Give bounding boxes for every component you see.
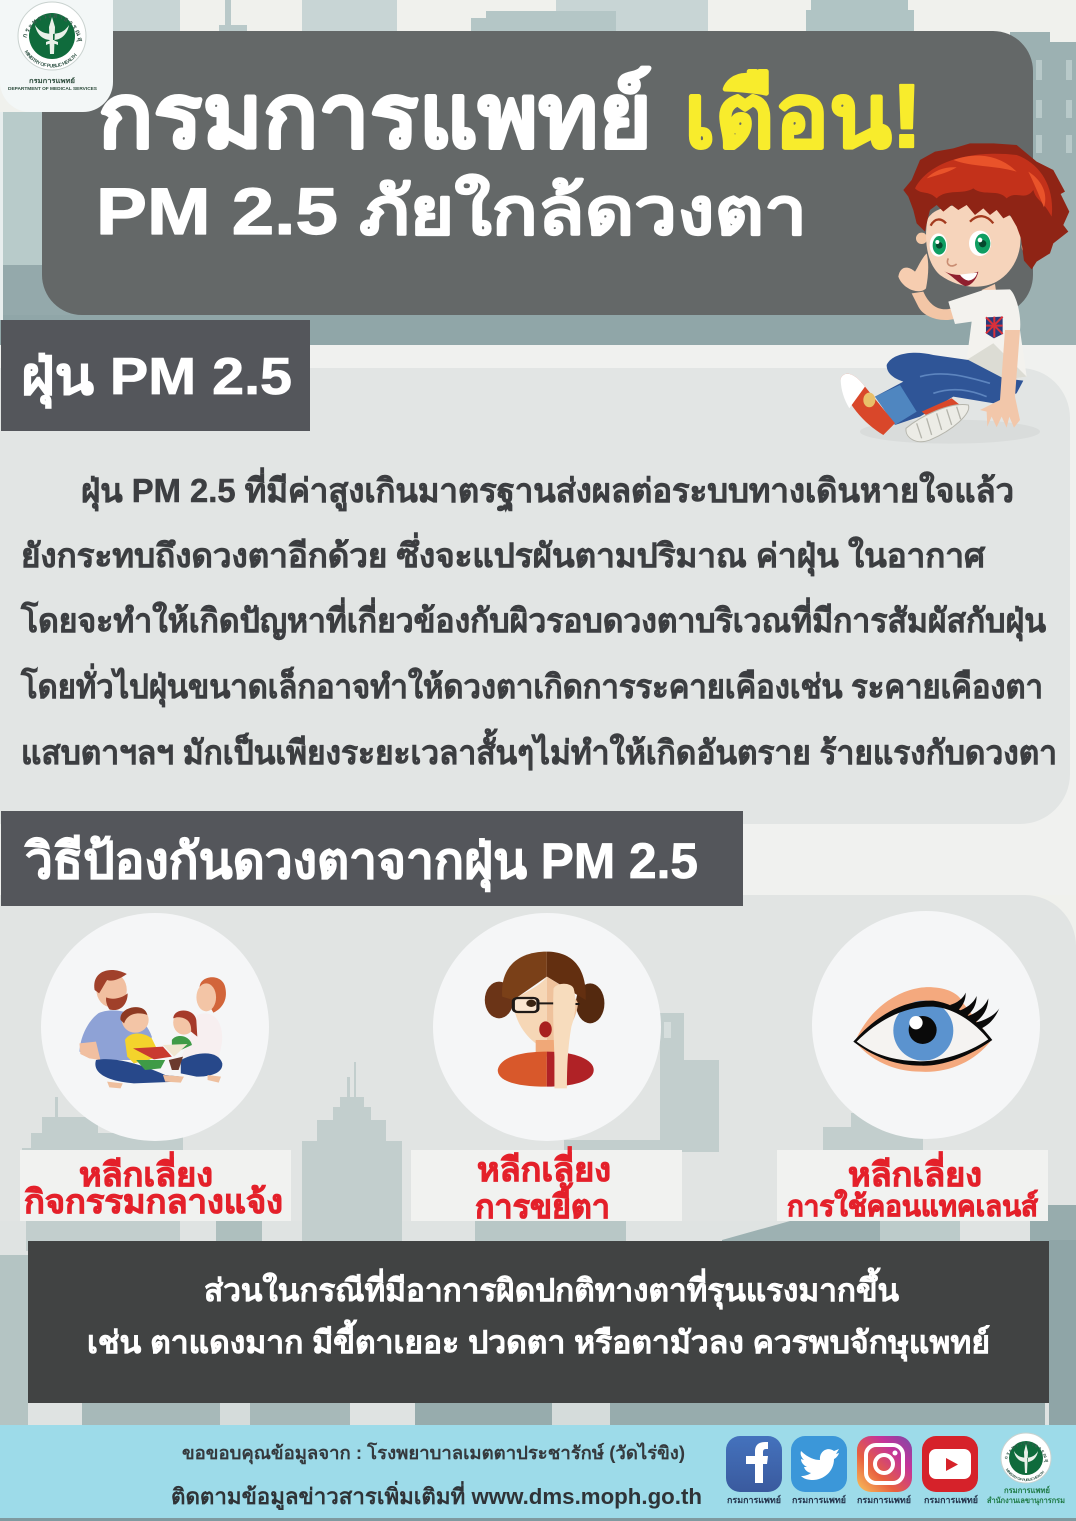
logo: ministry of public health: กระทรวงสาธารณสุข [1004,1442,1048,1462]
girl [173,1011,195,1035]
label: avoid rubbing eyes: หลีกเลี่ยง [477,1146,611,1188]
label: avoid outdoor activity: กิจกรรมกลางแจ้ง [24,1183,283,1220]
icon: youtube [922,1436,978,1492]
boy [122,1007,149,1033]
section heading: PM 2.5 dust [1,320,310,431]
title [96,66,922,248]
shirt [948,289,1027,380]
mother [200,977,226,1013]
text block: description: ฝุ่น PM 2.5 ที่มีค่าสูงเกินมาตรฐานส่งผลต่อระบบทางเดินหายใจแล้ว [81,467,1014,512]
section heading: PM 2.5 dust: ฝุ่น PM 2.5 [21,348,292,409]
title: PM 2.5 ภัยใกล้ดวงตา [96,172,807,248]
circle: avoid contact lenses [812,911,1040,1139]
callout: when to see an ophthalmologist: เช่น ตาแดงมาก มีขี้ตาเยอะ ปวดตา หรือตามัวลง ควรพบจักษุแพทย์ [87,1319,990,1362]
arm and hand [912,292,957,320]
circle: avoid outdoor activity [41,913,269,1141]
logo badge [0,0,113,112]
ears [916,233,927,244]
father [79,1010,152,1060]
jeans [95,1059,181,1083]
text block: description: โดยจะทำให้เกิดปัญหาที่เกี่ยวข้องกับผิวรอบดวงตาบริเวณที่มีการสัมผัสกับฝุ่น [20,597,1046,642]
jeans [875,353,1023,425]
right arm and hand [980,330,1020,428]
label: avoid contact lenses [777,1150,1048,1223]
logo badge: กรมการแพทย์ [29,77,75,85]
icon labels: กรมการแพทย์ [727,1494,781,1505]
icon labels: กรมการแพทย์ [792,1494,846,1505]
flag pocket [986,317,1003,338]
label: avoid contact lenses: การใช้คอนแทคเลนส์ [787,1189,1038,1223]
text block: description: แสบตาฯลฯ มักเป็นเพียงระยะเวลาสั้นๆไม่ทำให้เกิดอันตราย ร้ายแรงกับดวงตา [21,728,1057,771]
icon: family reading together [79,970,226,1088]
logo: ministry of public health: สำนักงานเลขานุการกรม [987,1496,1065,1506]
label: avoid rubbing eyes [411,1146,682,1225]
callout: when to see an ophthalmologist [28,1241,1049,1403]
logo badge: MINISTRY OF PUBLIC HEALTH [24,50,77,68]
logo: ministry of public health: MINISTRY OF PUBLIC HEALTH [1006,1468,1044,1482]
panel: light band and description background [0,345,1076,895]
logo badge: กระทรวงสาธารณสุข [23,14,82,42]
circle: avoid rubbing eyes [433,913,661,1141]
icon labels [727,1494,978,1505]
label: avoid outdoor activity [20,1150,291,1221]
icon: facebook [726,1436,782,1492]
text: website: ติดตามข้อมูลข่าวสารเพิ่มเติมที่ www.dms.moph.go.th [171,1480,702,1511]
panel: prevention background with skyline [0,895,1076,1240]
section heading: how to protect eyes: วิธีป้องกันดวงตาจากฝุ่น PM 2.5 [24,833,698,892]
icon: instagram [857,1436,912,1492]
brows [931,216,993,226]
nose and mouth [947,258,957,266]
icon: eye [853,987,999,1072]
title: กรมการแพทย์ [98,66,652,167]
text: credits: ขอขอบคุณข้อมูลจาก : โรงพยาบาลเมตตาประชารักษ์ (วัดไร่ขิง) [182,1442,685,1465]
title: เตือน! [684,67,922,167]
text block: description [20,467,1057,771]
footer [0,1425,1076,1521]
shoes [841,374,895,435]
neck [982,284,997,297]
logo: ministry of public health [987,1432,1065,1506]
label: avoid contact lenses: หลีกเลี่ยง [848,1151,982,1193]
icon: twitter [791,1436,847,1492]
label: avoid rubbing eyes: การขยี้ตา [475,1182,610,1225]
icon labels: กรมการแพทย์ [857,1494,911,1505]
lower skyline strip [0,1205,1076,1425]
eyes [930,233,947,257]
logo: ministry of public health: กรมการแพทย์ [1004,1485,1050,1495]
panel: title background [42,31,1033,315]
face [926,204,1020,287]
book [133,1047,172,1059]
icon: woman covering one eye [485,952,604,1088]
callout: when to see an ophthalmologist: ส่วนในกรณีที่มีอาการผิดปกติทางตาที่รุนแรงมากขึ้น [204,1267,899,1310]
section heading: how to protect eyes [1,811,743,906]
illustration: boy pointing at his eye [841,143,1069,444]
label: avoid outdoor activity: หลีกเลี่ยง [79,1151,213,1193]
text block: description: ยังกระทบถึงดวงตาอีกด้วย ซึ่งจะแปรผันตามปริมาณ ค่าฝุ่น ในอากาศ [21,532,986,577]
icon labels: กรมการแพทย์ [924,1494,978,1505]
logo badge: DEPARTMENT OF MEDICAL SERVICES [8,86,97,91]
hair [903,143,1069,269]
